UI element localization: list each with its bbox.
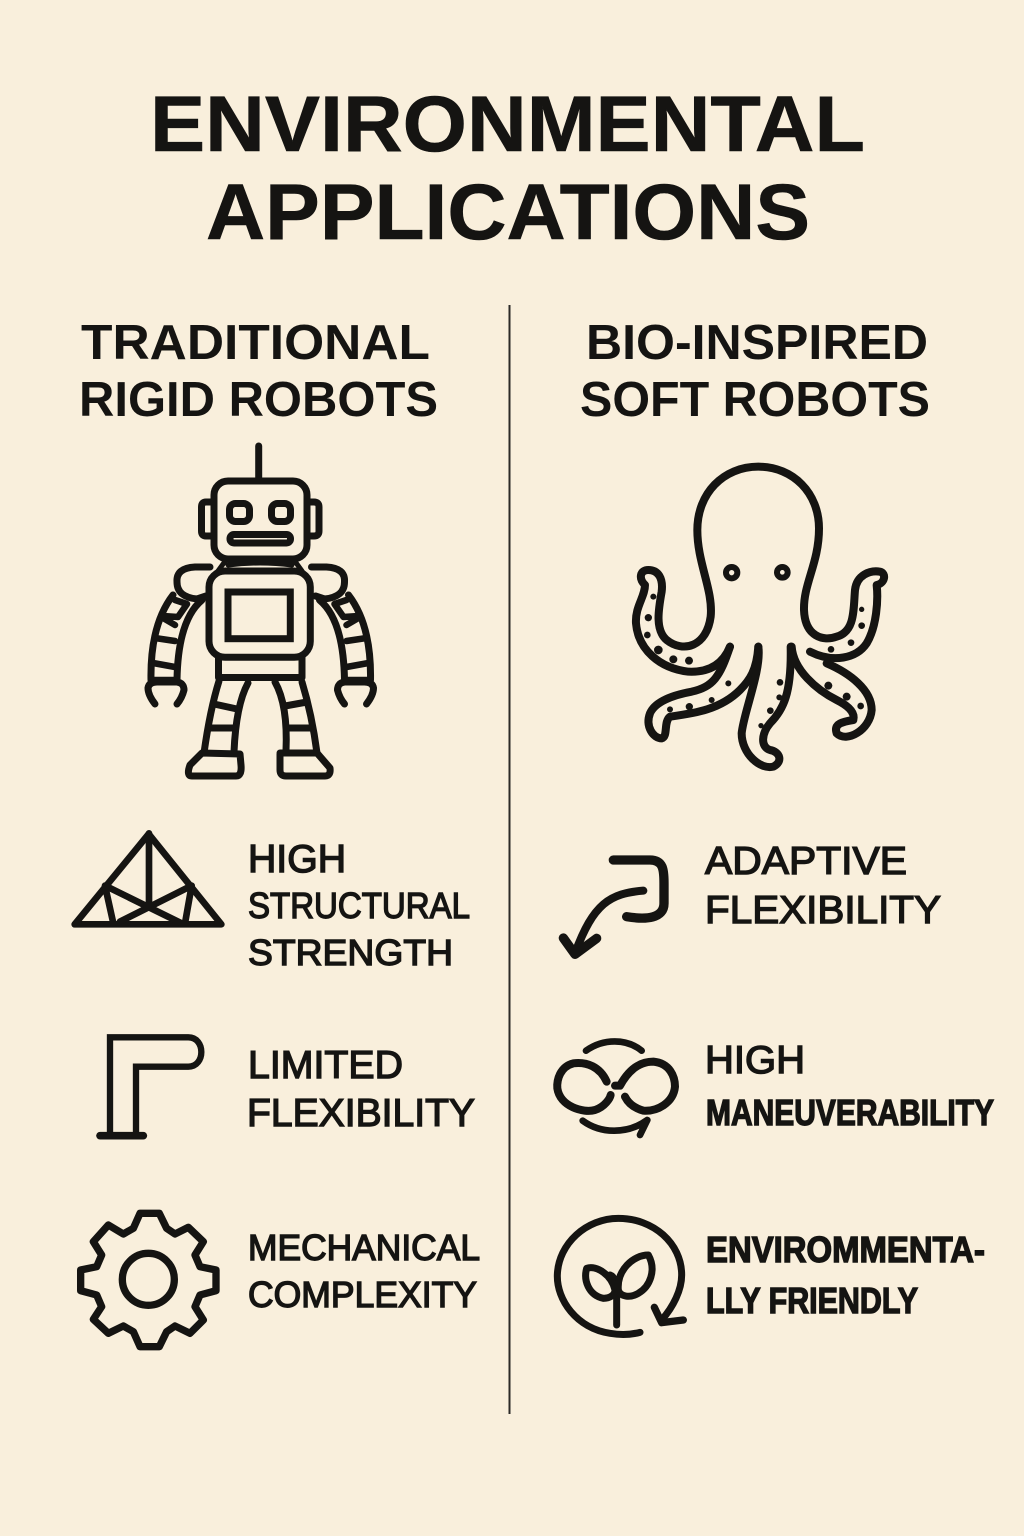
label: high maneuverability: HIGH <box>705 1039 805 1082</box>
icon: gear <box>81 1213 216 1347</box>
title <box>150 79 865 256</box>
icon: infinity loops with arrows <box>557 1041 675 1135</box>
label: mechanical complexity: MECHANICAL <box>248 1227 480 1268</box>
label: environmentally friendly <box>706 1229 985 1321</box>
label: limited flexibility: LIMITED <box>248 1044 403 1087</box>
icon: bending arrow <box>563 860 664 954</box>
heading: bio-inspired soft robots: BIO-INSPIRED <box>586 316 928 370</box>
label: high structural strength: STRENGTH <box>248 932 453 973</box>
title: APPLICATIONS <box>206 167 810 256</box>
label: adaptive flexibility: ADAPTIVE <box>705 840 907 883</box>
label: adaptive flexibility <box>705 840 941 932</box>
label: high structural strength: HIGH <box>248 838 346 881</box>
label: high maneuverability <box>705 1039 994 1133</box>
label: high structural strength: STRUCTURAL <box>248 885 470 926</box>
label: adaptive flexibility: FLEXIBILITY <box>705 889 941 932</box>
heading: traditional rigid robots: TRADITIONAL <box>81 316 430 370</box>
heading: traditional rigid robots <box>79 316 438 427</box>
heading: traditional rigid robots: RIGID ROBOTS <box>79 373 438 427</box>
panel: traditional rigid robots <box>75 316 480 1347</box>
label: limited flexibility <box>247 1044 475 1135</box>
icon: sprout in circular arrow <box>557 1218 683 1334</box>
label: mechanical complexity <box>248 1227 480 1315</box>
label: mechanical complexity: COMPLEXITY <box>248 1274 477 1315</box>
label: environmentally friendly: LLY FRIENDLY <box>706 1280 918 1321</box>
icon: octopus <box>636 467 884 767</box>
panel: bio-inspired soft robots <box>557 316 994 1334</box>
label: high structural strength <box>248 838 470 973</box>
title: ENVIRONMENTAL <box>150 79 865 168</box>
label: limited flexibility: FLEXIBILITY <box>247 1092 475 1135</box>
heading: bio-inspired soft robots <box>580 316 930 427</box>
icon: robot <box>148 446 374 776</box>
icon: roof truss <box>75 833 221 924</box>
heading: bio-inspired soft robots: SOFT ROBOTS <box>580 373 930 427</box>
icon: rigid bent beam <box>100 1037 201 1136</box>
label: environmentally friendly: ENVIROMMENTA- <box>706 1229 985 1270</box>
